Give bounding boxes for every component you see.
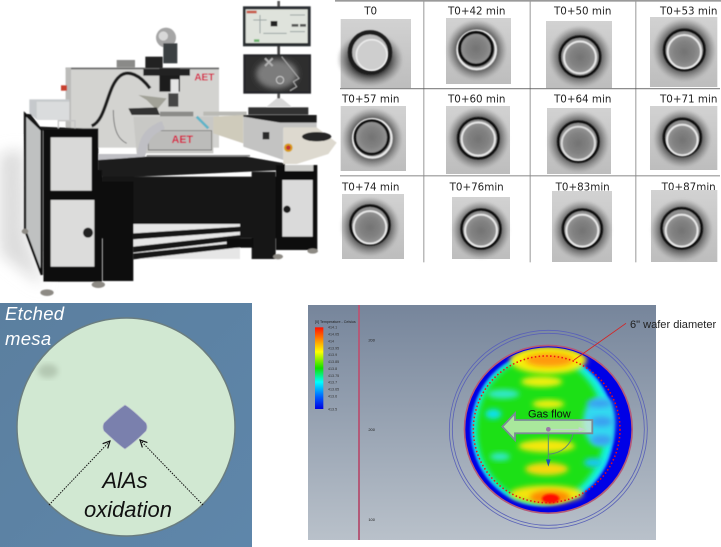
arrow: right oxidation front	[140, 440, 203, 505]
legend: temperature scale: 414.1	[328, 326, 337, 330]
back housing: AET	[194, 73, 214, 84]
legend: temperature scale: [0] Temperature - Celsius	[315, 320, 356, 324]
wafer rings	[449, 330, 647, 528]
cell: T0+57	[341, 93, 406, 171]
gas-flow axes	[546, 427, 585, 467]
arrow: gas flow	[502, 413, 592, 440]
small control box	[29, 99, 69, 120]
back housing	[61, 57, 219, 148]
grid lines	[335, 0, 721, 262]
cell: T0	[337, 6, 411, 88]
cell: T0+64: T0+64 min	[553, 93, 611, 105]
cell: T0+42: T0+42 min	[447, 6, 505, 18]
legend: temperature scale: 413.8	[328, 367, 337, 371]
callout: wafer diameter: 6" wafer diameter	[630, 319, 717, 331]
table top	[98, 157, 285, 178]
ruler	[358, 305, 376, 540]
legend: temperature scale: 413.65	[328, 388, 339, 392]
legend: temperature scale: 413.85	[328, 360, 339, 364]
label: AlAs oxidation: AlAs	[100, 468, 148, 493]
cell: T0+57: T0+57 min	[341, 93, 399, 105]
cell: T0+87: T0+87min	[661, 182, 716, 194]
floor shadow	[0, 150, 43, 287]
legend: temperature scale: 413.9	[328, 353, 337, 357]
legend: temperature scale: 413.7	[328, 381, 337, 385]
cell: T0+60	[446, 93, 510, 174]
lower monitor: mesa camera	[243, 54, 311, 94]
feet	[22, 229, 318, 296]
cell: T0+42	[446, 6, 511, 84]
process chamber: AET	[172, 134, 193, 146]
right console	[243, 107, 337, 164]
cell: T0+53	[650, 6, 717, 87]
cell: T0+76: T0+76min	[449, 182, 504, 194]
cell: T0+50	[546, 6, 612, 88]
cell: T0+71	[650, 93, 717, 170]
label: AlAs oxidation: oxidation	[84, 497, 172, 522]
monitor stand	[267, 1, 292, 107]
label: Etched mesa: mesa	[5, 328, 51, 349]
cell: T0+50: T0+50 min	[553, 6, 611, 18]
left cabinet	[25, 114, 102, 282]
legend: temperature scale: 413.95	[328, 346, 339, 350]
label: gas flow: Gas flow	[528, 409, 571, 421]
legend: temperature scale: 414	[328, 339, 334, 343]
ruler: 200	[368, 427, 376, 432]
panel: etched mesa micrograph	[0, 303, 252, 547]
under-frame	[102, 172, 277, 281]
panel: temperature simulation	[308, 305, 717, 540]
etched mesa disc	[17, 318, 235, 536]
legend: temperature scale: 413.5	[328, 408, 337, 412]
panel: time-lapse oxidation grid	[335, 0, 721, 262]
cell: T0+74	[340, 182, 404, 259]
legend: temperature scale	[315, 320, 356, 412]
process chamber	[99, 107, 250, 158]
cell: T0+76	[449, 182, 510, 259]
legend: temperature scale: 414.05	[328, 333, 339, 337]
ruler: 100	[368, 517, 376, 522]
cell: T0+53: T0+53 min	[659, 6, 717, 18]
cell: T0+74: T0+74 min	[341, 182, 399, 194]
label: Etched mesa: Etched	[5, 303, 65, 324]
oxide aperture	[103, 405, 147, 449]
ruler: 200	[368, 337, 376, 342]
microscope column	[138, 28, 190, 110]
cell: T0+83	[552, 182, 612, 262]
cell: T0: T0	[363, 6, 377, 18]
upper monitor: control software	[243, 6, 311, 46]
legend: temperature scale: 413.6	[328, 394, 337, 398]
cell: T0+87	[650, 182, 717, 262]
cell: T0+60: T0+60 min	[447, 93, 505, 105]
wafer outline: 6 inch	[473, 356, 620, 503]
photo: oxidation furnace machine	[0, 1, 337, 296]
callout: wafer diameter	[574, 319, 717, 360]
heat map	[464, 345, 639, 514]
arrow: left oxidation front	[49, 441, 110, 505]
cell: T0+71: T0+71 min	[659, 93, 717, 105]
cell: T0+83: T0+83min	[555, 182, 610, 194]
cell: T0+64	[547, 93, 611, 174]
legend: temperature scale: 413.75	[328, 374, 339, 378]
right cabinet	[276, 165, 317, 250]
